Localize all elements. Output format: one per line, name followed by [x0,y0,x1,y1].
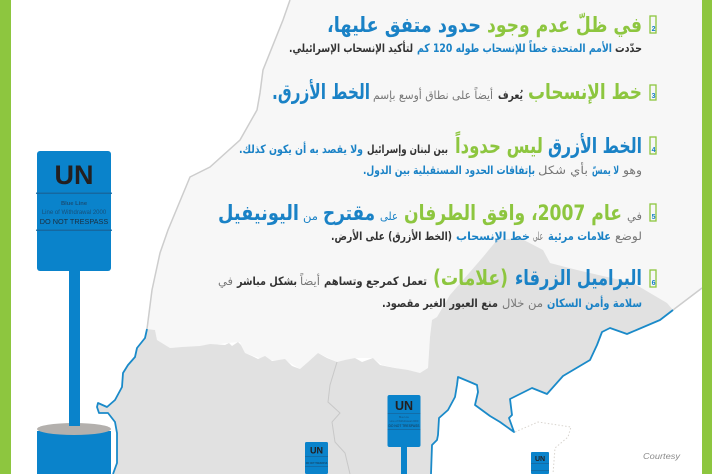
point 6 heading and text [218,266,642,290]
point 5 text: على [533,229,543,243]
point 6 heading and text: تعمل كمرجع وتساهم [324,274,427,289]
point 5 heading: من [303,209,318,224]
large UN barrel on pole: UN [54,160,94,190]
small UN barrel: UN [310,446,323,456]
point 6 second line: سلامة وأمن السكان [547,295,642,311]
point 5 heading: عام 2007، وافق الطرفان [404,201,622,225]
internal district boundary [328,362,350,474]
right green border [702,0,712,474]
point 6 heading and text: أيضاً [300,272,320,288]
point 4 heading and text: ليس حدوداً [455,130,543,158]
point 2 heading [327,12,642,37]
small UN barrel: DO NOT TRESPASS [306,462,328,465]
medium UN barrel [388,395,420,474]
point 6 heading and text: البراميل الزرقاء [515,266,642,290]
large UN barrel on pole [36,151,112,428]
point 3 heading and text [272,78,642,104]
point 2 text [289,39,642,56]
point 3 heading and text: خط الإنسحاب [528,80,642,104]
point 4 heading and text: الخط الأزرق [548,132,642,158]
large UN barrel on pole: Blue Line [61,201,88,207]
point 6 heading and text: بشكل مباشر [236,274,297,288]
point 6 second line: منع العبور الغير مقصود. [382,296,498,311]
point 5 heading: اليونيفيل [218,201,299,225]
medium UN barrel: UN [395,399,413,413]
point 5 marker [650,204,656,221]
point 2 text: الأمم المتحدة خطاً للإنسحاب طوله 120 كم [417,39,612,56]
small UN barrel [305,442,328,474]
large UN barrel on pole: DO NOT TRESPASS [40,217,108,226]
point 6 heading and text: (علامات) [433,266,508,290]
point 4 second line [363,162,642,178]
point 2 text: لتأكيد الإنسحاب الإسرائيلي. [289,40,413,55]
grey area of south Lebanon [97,238,673,474]
dotted line [515,422,571,474]
barrel base [37,420,111,474]
point 4 second line: بإتفاقات الحدود المستقبلية بين الدول. [363,163,535,178]
point 3 heading and text: أيضاً على نطاق أوسع بإسم [373,86,493,103]
point 3 marker [650,85,656,100]
point 4 heading and text: ولا يقصد به أن يكون كذلك. [239,141,363,157]
point 5 heading [218,201,642,225]
Blue Line, western section [97,329,147,474]
point 5 text [331,229,642,244]
point 5 heading: في [627,209,642,223]
point 3 heading and text: الخط الأزرق. [272,78,370,104]
smallest UN barrel [531,452,549,474]
smallest UN barrel: UN [535,456,545,463]
point 2 heading: في ظلّ عدم وجود [487,12,642,37]
medium UN barrel: Line of Withdrawal 2000 [390,419,419,423]
point 4 second line: لا يمسّ [592,163,619,177]
point 4 second line: بأي شكل [538,162,588,177]
point 2 text: حدّدت [615,41,642,55]
point 4 heading and text [239,130,642,158]
point 4 second line: وهو [622,163,642,178]
point 5 text: (الخط الأزرق) على الأرض. [331,229,452,243]
courtesy credit: Courtesy [643,452,681,461]
point 5 heading: على [380,209,398,223]
coast outline of the light area [147,0,702,329]
left green border [0,0,10,474]
point 6 second line: من خلال [502,296,543,311]
point 5 text: لوضع [615,229,642,244]
point 4 marker [650,137,656,154]
point 6 marker: 6 [652,280,656,287]
point 6 marker [650,270,656,287]
point 2 marker [650,16,656,33]
point 3 marker: 3 [652,93,656,100]
medium UN barrel: DO NOT TRESPASS [389,424,420,428]
point 2 heading: حدود متفق عليها، [327,13,481,37]
point 5 text: علامات مرئية [548,229,611,243]
point 4 marker: 4 [652,147,656,154]
point 2 marker: 2 [652,26,656,33]
point 5 marker: 5 [652,214,656,221]
point 3 heading and text: يُعرف [498,88,523,102]
point 6 heading and text: في [218,274,233,288]
point 5 text: خط الإنسحاب [456,229,530,243]
medium UN barrel: Blue Line [399,416,410,419]
point 5 heading: مقترح [323,201,375,225]
point 4 heading and text: بين لبنان وإسرائيل [367,142,448,157]
light area north of the line [147,0,702,373]
Blue Line, eastern section [431,310,673,474]
point 6 second line [382,295,642,311]
large UN barrel on pole: Line of Withdrawal 2000 [42,210,107,216]
